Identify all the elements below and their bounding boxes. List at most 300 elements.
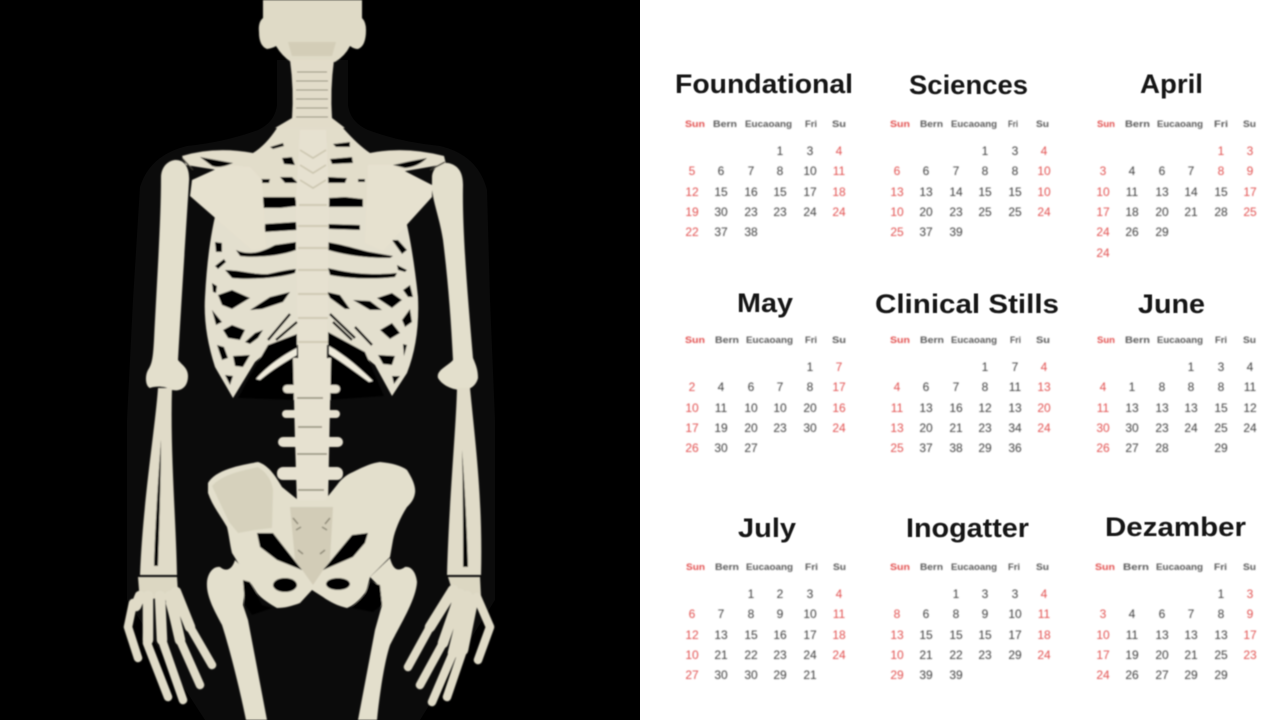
weekday header: Eucaoang	[951, 335, 997, 346]
heading: Inogatter: Inogatter	[906, 513, 1030, 543]
weekday header	[890, 335, 1050, 346]
day grid: 1	[1218, 587, 1225, 601]
weekday header: Bern	[715, 335, 739, 346]
lower rib gaps and costal streaks	[238, 334, 297, 400]
day grid: 10	[1096, 185, 1110, 199]
day grid: 13	[1155, 401, 1169, 415]
day grid: 16	[832, 401, 846, 415]
day grid: 17	[685, 421, 699, 435]
panel: skeleton	[0, 0, 640, 720]
day grid: 3	[1218, 360, 1225, 374]
day grid: 17	[1008, 628, 1022, 642]
day grid: 18	[832, 185, 846, 199]
day grid: 10	[1037, 164, 1051, 178]
day grid: 10	[803, 164, 817, 178]
day grid: 1	[982, 360, 989, 374]
day grid: 1	[1129, 380, 1136, 394]
day grid	[890, 587, 1051, 682]
day grid: 9	[982, 607, 989, 621]
day grid: 21	[1184, 205, 1198, 219]
day grid: 24	[1096, 246, 1110, 260]
thoracic spine	[296, 130, 329, 360]
day grid: 4	[1041, 360, 1048, 374]
day grid: 17	[1243, 185, 1257, 199]
left hand	[128, 592, 212, 700]
day grid: 9	[1247, 164, 1254, 178]
day grid: 2	[777, 587, 784, 601]
weekday header: Fri	[1008, 562, 1020, 573]
heading: Clinical Stills: Clinical Stills	[875, 289, 1059, 319]
day grid	[685, 144, 846, 239]
day grid: 24	[1184, 421, 1198, 435]
scapula left	[190, 165, 266, 250]
day grid: 26	[1125, 668, 1139, 682]
day grid: 11	[1038, 607, 1051, 621]
weekday header: Fri	[805, 335, 817, 346]
weekday header: Su	[1243, 562, 1256, 573]
day grid: 12	[1243, 401, 1257, 415]
sacrum	[290, 507, 333, 585]
day grid: 8	[953, 607, 960, 621]
day grid: 13	[1184, 401, 1198, 415]
weekday header: Sun	[890, 119, 910, 130]
day grid: 11	[891, 401, 904, 415]
day grid: 9	[777, 607, 784, 621]
day grid: 17	[1243, 628, 1257, 642]
day grid: 29	[1214, 441, 1228, 455]
day grid: 12	[978, 401, 992, 415]
right arm	[430, 162, 481, 597]
day grid: 1	[982, 144, 989, 158]
day grid: 4	[1041, 587, 1048, 601]
day grid: 17	[803, 628, 817, 642]
weekday header: Fri	[1010, 335, 1021, 346]
day grid: 4	[836, 144, 843, 158]
day grid: 27	[685, 668, 699, 682]
day grid: 7	[1012, 360, 1019, 374]
day grid: 1	[1218, 144, 1225, 158]
day grid: 19	[714, 421, 728, 435]
heading: Sciences: Sciences	[909, 70, 1028, 100]
day grid: 10	[1037, 185, 1051, 199]
day grid: 22	[685, 225, 699, 239]
day grid: 10	[890, 648, 904, 662]
weekday header: Fri	[1008, 119, 1018, 130]
weekday header: Bern	[920, 119, 943, 130]
weekday header	[890, 119, 1049, 130]
weekday header: Fri	[1215, 335, 1227, 346]
day grid: 19	[1125, 648, 1139, 662]
day grid: 8	[982, 164, 989, 178]
day grid: 13	[890, 628, 904, 642]
day grid: 10	[773, 401, 787, 415]
day grid: 1	[1188, 360, 1195, 374]
day grid: 7	[953, 164, 960, 178]
weekday header	[685, 119, 846, 130]
day grid: 30	[1096, 421, 1110, 435]
day grid: 29	[1184, 668, 1198, 682]
day grid: 25	[890, 225, 904, 239]
day grid: 24	[832, 421, 846, 435]
day grid: 24	[803, 205, 817, 219]
day grid: 37	[714, 225, 728, 239]
day grid: 29	[1214, 668, 1228, 682]
day grid: 24	[1037, 421, 1051, 435]
day grid: 3	[1247, 587, 1254, 601]
day grid: 13	[1214, 628, 1228, 642]
weekday header: Eucaoang	[745, 119, 792, 130]
weekday header	[890, 562, 1049, 573]
day grid: 11	[1244, 380, 1257, 394]
day grid: 3	[807, 587, 814, 601]
day grid: 29	[978, 441, 992, 455]
day grid: 25	[1008, 205, 1022, 219]
day grid: 25	[978, 205, 992, 219]
day grid: 17	[1096, 205, 1110, 219]
day grid: 27	[1155, 668, 1169, 682]
day grid: 8	[894, 607, 901, 621]
day grid: 11	[715, 401, 728, 415]
day grid: 29	[1008, 648, 1022, 662]
day grid: 22	[744, 648, 758, 662]
weekday header: Fri	[1214, 119, 1228, 130]
day grid: 18	[1037, 628, 1051, 642]
day grid: 24	[1096, 225, 1110, 239]
weekday header	[685, 335, 846, 346]
day grid: 3	[1012, 144, 1019, 158]
day grid: 21	[714, 648, 728, 662]
weekday header: Eucaoang	[1156, 562, 1203, 573]
calendar: Inogatter	[890, 513, 1051, 682]
weekday header: Eucaoang	[746, 335, 793, 346]
day grid: 2	[689, 380, 696, 394]
day grid: 7	[953, 380, 960, 394]
weekday header: Bern	[715, 562, 739, 573]
day grid: 25	[1214, 648, 1228, 662]
day grid: 21	[803, 668, 817, 682]
calendar: July	[685, 513, 846, 682]
day grid: 10	[890, 205, 904, 219]
femur right	[358, 558, 417, 720]
day grid: 30	[1125, 421, 1139, 435]
day grid: 1	[777, 144, 784, 158]
calendar: Foundational	[675, 69, 853, 239]
day grid: 15	[978, 628, 992, 642]
weekday header: Sun	[1095, 562, 1115, 573]
day grid: 13	[1008, 401, 1022, 415]
weekday header: Su	[1243, 119, 1256, 130]
day grid: 39	[919, 668, 933, 682]
day grid: 23	[1155, 421, 1169, 435]
day grid: 13	[890, 185, 904, 199]
left arm	[138, 158, 193, 602]
day grid: 7	[836, 360, 843, 374]
day grid: 20	[803, 401, 817, 415]
day grid: 24	[1243, 421, 1257, 435]
weekday header: Fri	[805, 119, 817, 130]
weekday header: Su	[832, 335, 846, 346]
day grid: 15	[949, 628, 963, 642]
day grid: 15	[1214, 185, 1228, 199]
pelvis	[208, 462, 415, 608]
day grid: 27	[1125, 441, 1139, 455]
day grid: 20	[1155, 205, 1169, 219]
weekday header: Su	[1243, 335, 1256, 346]
weekday header: Su	[833, 562, 846, 573]
weekday header: Su	[832, 119, 846, 130]
day grid: 28	[1214, 205, 1228, 219]
day grid: 29	[1155, 225, 1169, 239]
day grid: 8	[1159, 380, 1166, 394]
rib gaps left	[212, 143, 298, 385]
day grid: 23	[949, 205, 963, 219]
day grid: 4	[718, 380, 725, 394]
weekday header	[1097, 119, 1256, 130]
day grid: 15	[744, 628, 758, 642]
weekday header: Eucaoang	[951, 562, 997, 573]
day grid: 20	[919, 205, 933, 219]
day grid: 15	[978, 185, 992, 199]
day grid: 17	[832, 380, 846, 394]
day grid: 25	[890, 441, 904, 455]
weekday header: Bern	[1123, 562, 1149, 573]
day grid: 8	[982, 380, 989, 394]
day grid: 7	[1188, 607, 1195, 621]
day grid: 6	[923, 380, 930, 394]
day grid: 37	[919, 441, 933, 455]
day grid: 4	[1129, 164, 1136, 178]
day grid: 11	[1126, 628, 1139, 642]
day grid: 7	[718, 607, 725, 621]
weekday header: Eucaoang	[951, 119, 997, 130]
day grid: 13	[1155, 628, 1169, 642]
day grid: 29	[773, 668, 787, 682]
day grid: 6	[1159, 607, 1166, 621]
day grid: 6	[1159, 164, 1166, 178]
day grid: 22	[949, 648, 963, 662]
day grid: 30	[803, 421, 817, 435]
day grid: 10	[803, 607, 817, 621]
day grid: 10	[685, 648, 699, 662]
day grid: 6	[894, 164, 901, 178]
day grid: 28	[1155, 441, 1169, 455]
day grid: 6	[923, 164, 930, 178]
weekday header: Sun	[686, 562, 705, 573]
panel: calendar	[640, 0, 1280, 720]
day grid: 25	[1243, 205, 1257, 219]
skull	[259, 0, 366, 62]
ilium shading	[212, 467, 273, 533]
weekday header: Sun	[685, 119, 705, 130]
day grid: 7	[1188, 164, 1195, 178]
weekday header: Bern	[1125, 335, 1150, 346]
day grid	[685, 360, 846, 455]
day grid: 11	[1009, 380, 1022, 394]
day grid: 16	[949, 401, 963, 415]
day grid: 39	[949, 225, 963, 239]
day grid: 8	[1188, 380, 1195, 394]
weekday header: Sun	[1097, 335, 1115, 346]
day grid: 6	[689, 607, 696, 621]
day grid: 38	[949, 441, 963, 455]
day grid: 10	[744, 401, 758, 415]
heading: Foundational: Foundational	[675, 69, 853, 99]
day grid: 14	[949, 185, 963, 199]
day grid: 4	[1100, 380, 1107, 394]
weekday header: Eucaoang	[746, 562, 793, 573]
day grid: 37	[919, 225, 933, 239]
day grid: 8	[1012, 164, 1019, 178]
day grid: 8	[777, 164, 784, 178]
day grid: 11	[1097, 401, 1110, 415]
weekday header: Bern	[1125, 119, 1150, 130]
weekday header: Fri	[805, 562, 818, 573]
day grid: 3	[1012, 587, 1019, 601]
day grid: 15	[1214, 401, 1228, 415]
weekday header: Sun	[685, 335, 705, 346]
day grid: 24	[1037, 648, 1051, 662]
day grid: 34	[1008, 421, 1022, 435]
day grid: 18	[832, 628, 846, 642]
day grid: 8	[1218, 380, 1225, 394]
day grid: 30	[714, 668, 728, 682]
day grid: 26	[1096, 441, 1110, 455]
day grid: 27	[744, 441, 758, 455]
day grid: 20	[919, 421, 933, 435]
weekday header	[1097, 335, 1256, 346]
day grid: 7	[777, 380, 784, 394]
day grid: 23	[773, 648, 787, 662]
day grid: 23	[1243, 648, 1257, 662]
rib cage	[205, 142, 418, 400]
day grid: 30	[714, 205, 728, 219]
clavicle slits	[200, 157, 427, 168]
day grid: 24	[832, 205, 846, 219]
day grid: 20	[1155, 648, 1169, 662]
day grid: 3	[1100, 164, 1107, 178]
day grid: 9	[1247, 607, 1254, 621]
day grid: 8	[1218, 607, 1225, 621]
day grid: 10	[685, 401, 699, 415]
day grid: 16	[744, 185, 758, 199]
day grid: 17	[1096, 648, 1110, 662]
day grid: 24	[803, 648, 817, 662]
day grid: 15	[773, 185, 787, 199]
weekday header: Su	[1036, 335, 1050, 346]
obturator foramen	[273, 578, 297, 592]
day grid: 23	[773, 205, 787, 219]
heading: June: June	[1138, 289, 1205, 319]
weekday header	[1095, 562, 1256, 573]
day grid: 39	[949, 668, 963, 682]
day grid: 23	[773, 421, 787, 435]
day grid: 20	[744, 421, 758, 435]
day grid: 24	[1037, 205, 1051, 219]
day grid: 13	[714, 628, 728, 642]
hip gaps	[243, 580, 382, 615]
day grid	[1096, 587, 1257, 682]
calendar: June	[1096, 289, 1257, 455]
day grid: 29	[890, 668, 904, 682]
sacral foramina	[293, 518, 330, 554]
heading: Dezamber: Dezamber	[1105, 512, 1247, 542]
heading: May: May	[737, 288, 793, 318]
femur left	[207, 560, 267, 720]
anatomical skeleton	[128, 0, 490, 720]
day grid: 19	[685, 205, 699, 219]
day grid: 4	[836, 587, 843, 601]
day grid: 18	[1125, 205, 1139, 219]
calendar: Clinical Stills	[875, 289, 1059, 455]
right hand	[408, 590, 490, 702]
day grid	[1096, 144, 1257, 260]
day grid: 21	[949, 421, 963, 435]
weekday header	[686, 562, 846, 573]
weekday header: Sun	[1097, 119, 1115, 130]
day grid: 12	[685, 185, 699, 199]
day grid: 11	[833, 164, 846, 178]
calendar: April	[1096, 69, 1257, 260]
day grid: 24	[1096, 668, 1110, 682]
weekday header: Bern	[920, 335, 944, 346]
day grid: 15	[1008, 185, 1022, 199]
day grid: 26	[685, 441, 699, 455]
calendar: May	[685, 288, 846, 455]
weekday header: Eucaoang	[1157, 335, 1203, 346]
day grid: 16	[773, 628, 787, 642]
scapula right	[365, 165, 432, 251]
day grid: 10	[1096, 628, 1110, 642]
day grid: 1	[953, 587, 960, 601]
day grid: 3	[982, 587, 989, 601]
day grid: 21	[919, 648, 933, 662]
day grid: 15	[919, 628, 933, 642]
day grid: 12	[685, 628, 699, 642]
day grid: 4	[1041, 144, 1048, 158]
day grid: 30	[744, 668, 758, 682]
day grid: 23	[744, 205, 758, 219]
weekday header: Su	[1036, 119, 1049, 130]
day grid: 24	[832, 648, 846, 662]
day grid: 13	[919, 185, 933, 199]
day grid: 23	[978, 648, 992, 662]
weekday header: Su	[1036, 562, 1049, 573]
heading: July: July	[738, 513, 796, 543]
calendar: Sciences	[890, 70, 1051, 239]
day grid: 38	[744, 225, 758, 239]
lumbar spine	[277, 358, 343, 505]
day grid: 6	[718, 164, 725, 178]
day grid: 13	[1037, 380, 1051, 394]
day grid	[890, 360, 1051, 455]
day grid: 21	[1184, 648, 1198, 662]
weekday header: Sun	[890, 335, 910, 346]
day grid: 20	[1037, 401, 1051, 415]
day grid: 26	[1125, 225, 1139, 239]
day grid: 8	[807, 380, 814, 394]
pelvic openings	[257, 533, 368, 570]
weekday header: Fri	[1214, 562, 1227, 573]
rib gaps right	[327, 142, 413, 384]
weekday header: Bern	[713, 119, 737, 130]
day grid: 23	[978, 421, 992, 435]
day grid: 5	[689, 164, 696, 178]
day grid: 13	[1184, 628, 1198, 642]
day grid: 14	[1184, 185, 1198, 199]
heading: April: April	[1140, 69, 1203, 99]
day grid: 13	[919, 401, 933, 415]
weekday header: Sun	[890, 562, 910, 573]
